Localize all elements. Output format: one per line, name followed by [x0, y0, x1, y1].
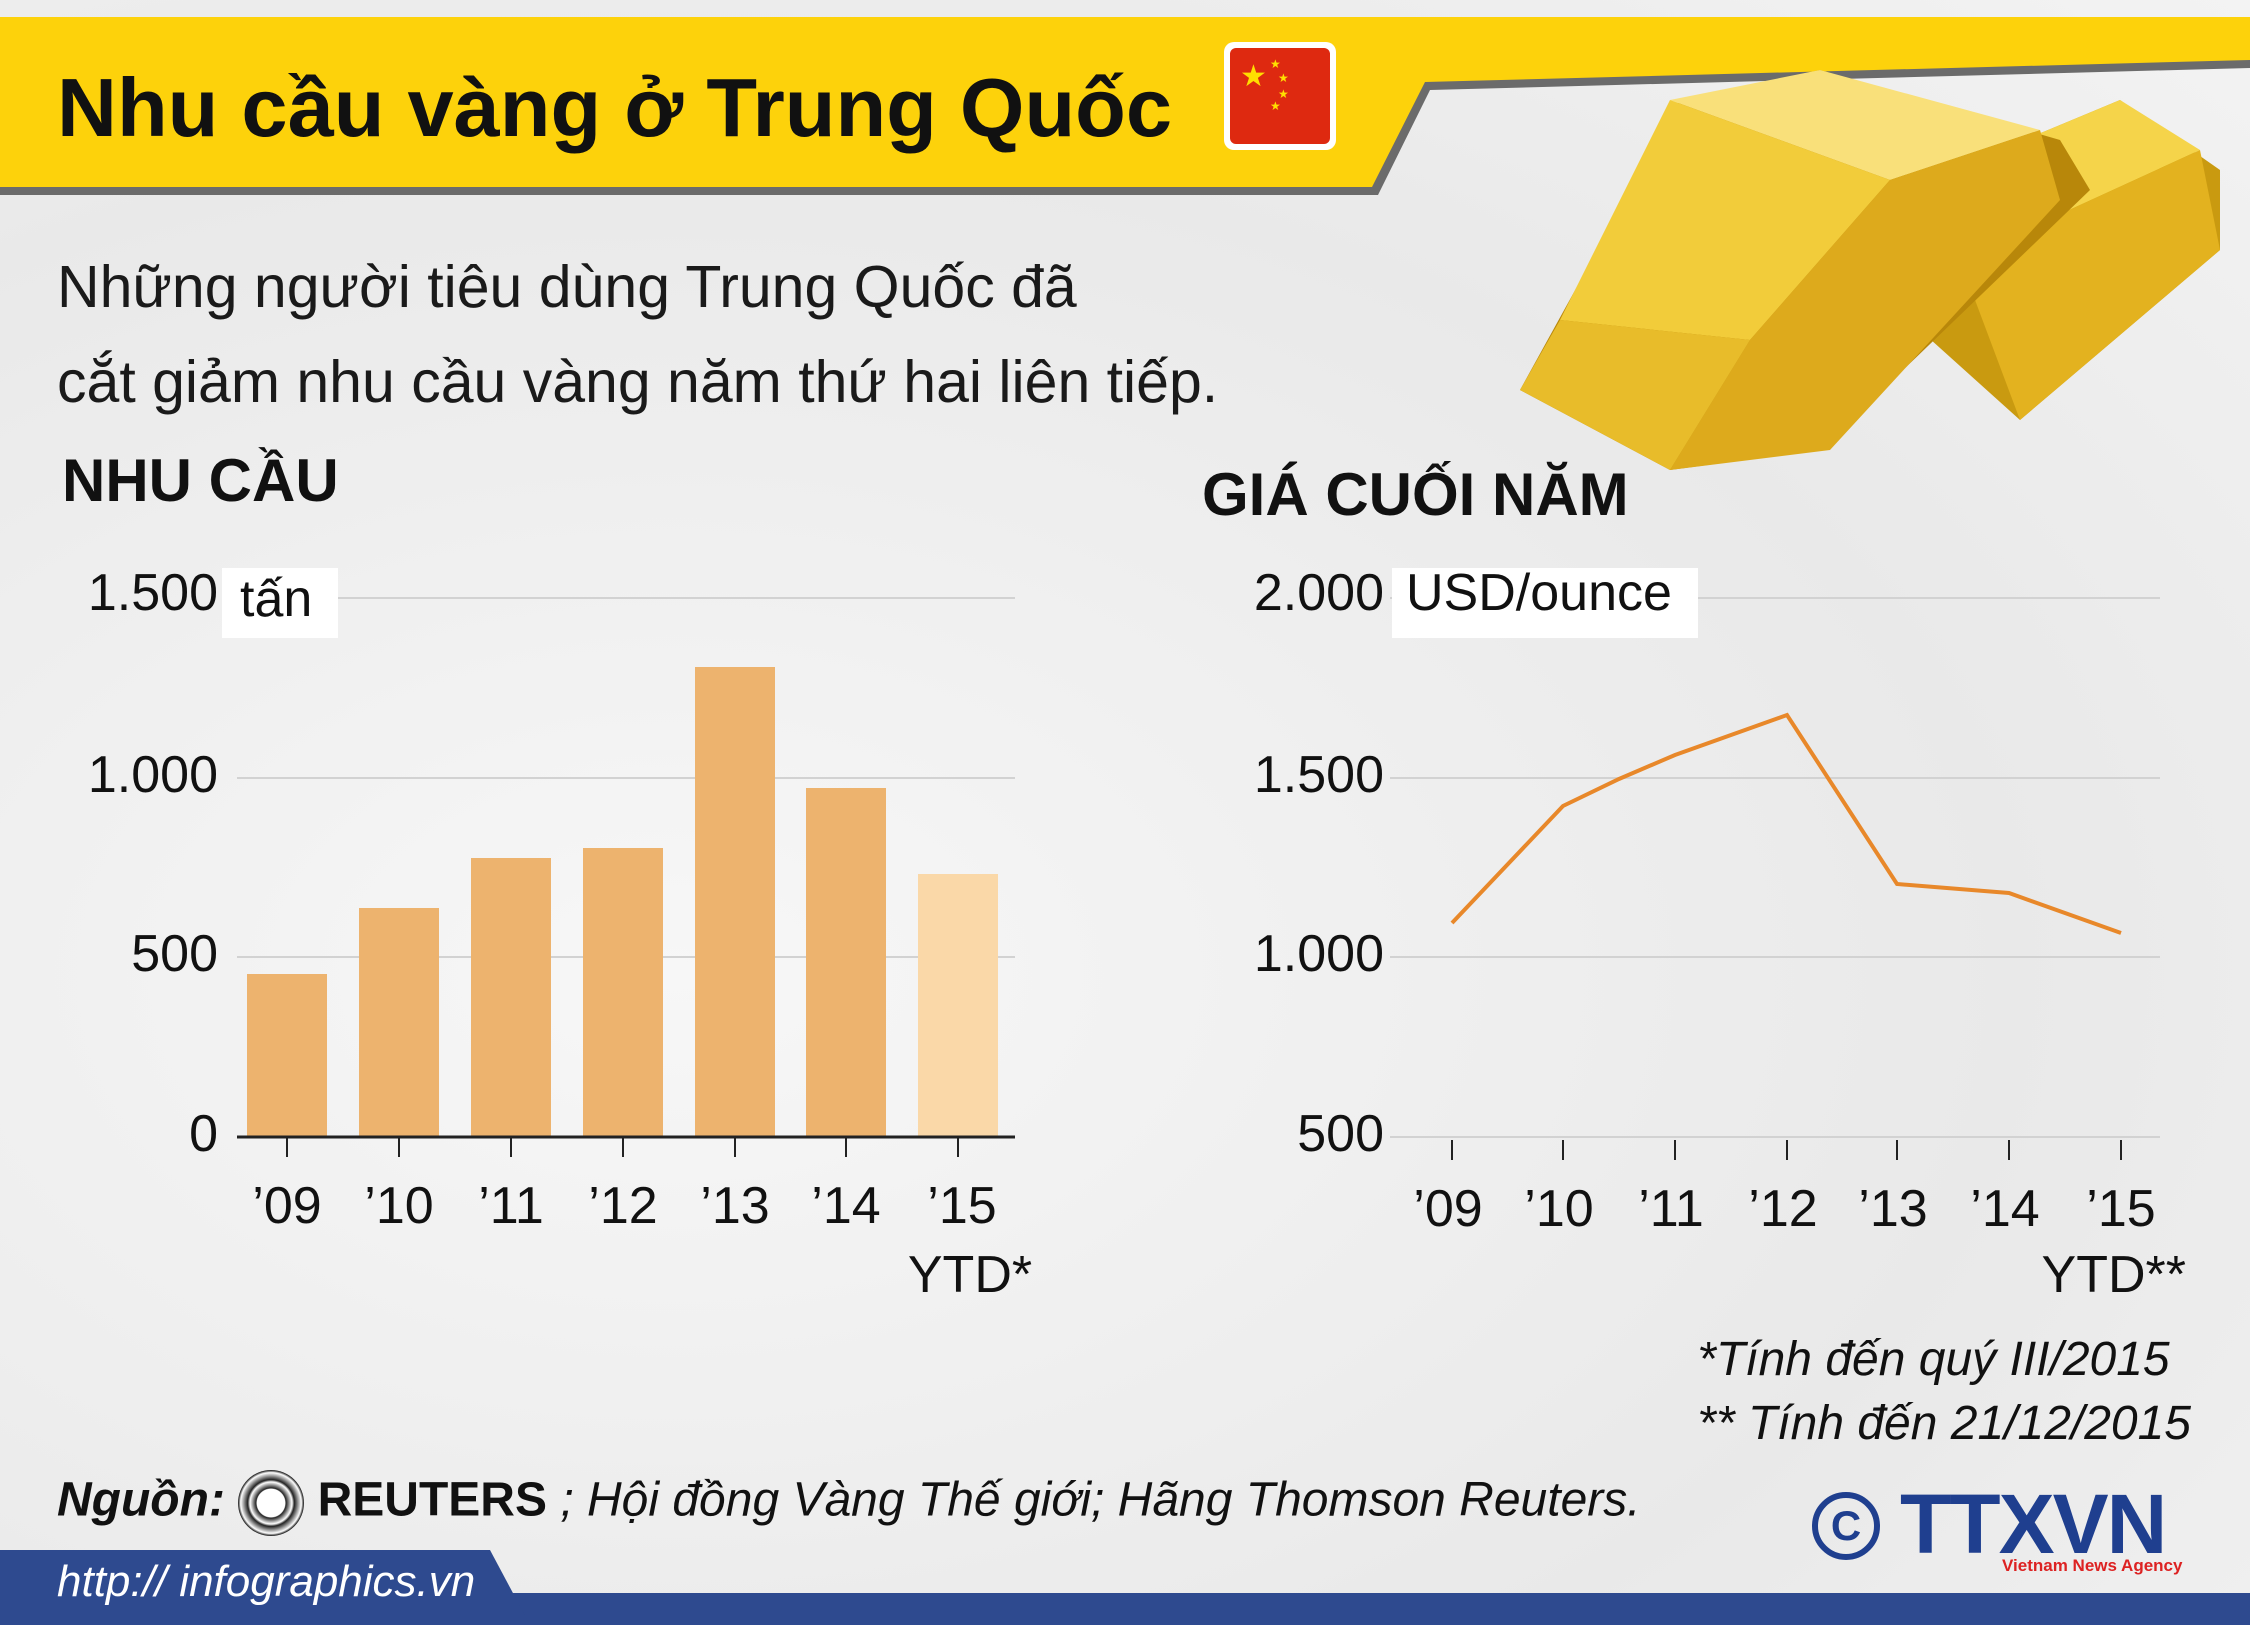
heading: price: GIÁ CUỐI NĂM — [1202, 461, 1629, 528]
line chart: ’11 — [1638, 1180, 1704, 1238]
line chart: 500 — [1297, 1105, 1384, 1163]
icon: china flag: ★ — [1278, 87, 1289, 101]
logo: TTXVN — [1812, 1477, 2182, 1575]
line chart: ’09 — [1413, 1180, 1483, 1238]
title: Nhu cầu vàng ở Trung Quốc — [57, 61, 1172, 154]
bar chart: ’14 — [811, 1177, 881, 1235]
bar chart: 500 — [131, 925, 218, 983]
footer bar — [0, 1550, 2250, 1625]
line chart: 2.000 — [1254, 564, 1384, 622]
subtitle — [57, 254, 1218, 415]
heading: demand: NHU CẦU — [62, 447, 339, 514]
icon: china flag — [1224, 42, 1336, 150]
bar chart: 1.000 — [88, 746, 218, 804]
bar chart: ’12 — [588, 1177, 658, 1235]
subtitle: Những người tiêu dùng Trung Quốc đã — [57, 254, 1077, 320]
line chart: ’14 — [1970, 1180, 2040, 1238]
gold bars — [1520, 70, 2220, 470]
bar chart: 1.500 — [88, 564, 218, 622]
icon: china flag: ★ — [1278, 71, 1289, 85]
footnotes: *Tính đến quý III/2015 — [1697, 1333, 2170, 1386]
footnotes — [1697, 1333, 2191, 1450]
line chart — [1254, 564, 2186, 1300]
url: http:// infographics.vn — [57, 1557, 475, 1606]
line chart: 1.500 — [1254, 746, 1384, 804]
bar chart: ’10 — [364, 1177, 434, 1235]
subtitle: cắt giảm nhu cầu vàng năm thứ hai liên tiếp. — [57, 349, 1218, 415]
icon: china flag: ★ — [1270, 57, 1281, 71]
bar chart: ’11 — [478, 1177, 544, 1235]
line chart: ’15 — [2086, 1180, 2156, 1238]
icon: china flag: ★ — [1270, 99, 1281, 113]
icon: china flag: ★ — [1240, 60, 1267, 93]
bar chart: ’15 — [927, 1177, 997, 1235]
bar chart: 0 — [189, 1105, 218, 1163]
footnotes: ** Tính đến 21/12/2015 — [1697, 1397, 2191, 1450]
logo: TTXVN: C — [1831, 1502, 1861, 1549]
header band — [0, 17, 2250, 195]
logo: TTXVN: Vietnam News Agency — [2002, 1556, 2182, 1575]
bar chart: tấn — [240, 570, 312, 628]
line chart: USD/ounce — [1406, 564, 1672, 622]
line chart: ’13 — [1858, 1180, 1928, 1238]
bar chart — [88, 564, 1032, 1300]
line chart: ’12 — [1748, 1180, 1818, 1238]
line chart: 1.000 — [1254, 925, 1384, 983]
source: Nguồn: REUTERS ; Hội đồng Vàng Thế giới; Hãng Thomson Reuters. — [57, 1474, 1641, 1527]
bar chart: ’09 — [252, 1177, 322, 1235]
line chart: ’10 — [1524, 1180, 1594, 1238]
logo: TTXVN: TTXVN — [1900, 1477, 2165, 1571]
bar chart: ’13 — [700, 1177, 770, 1235]
